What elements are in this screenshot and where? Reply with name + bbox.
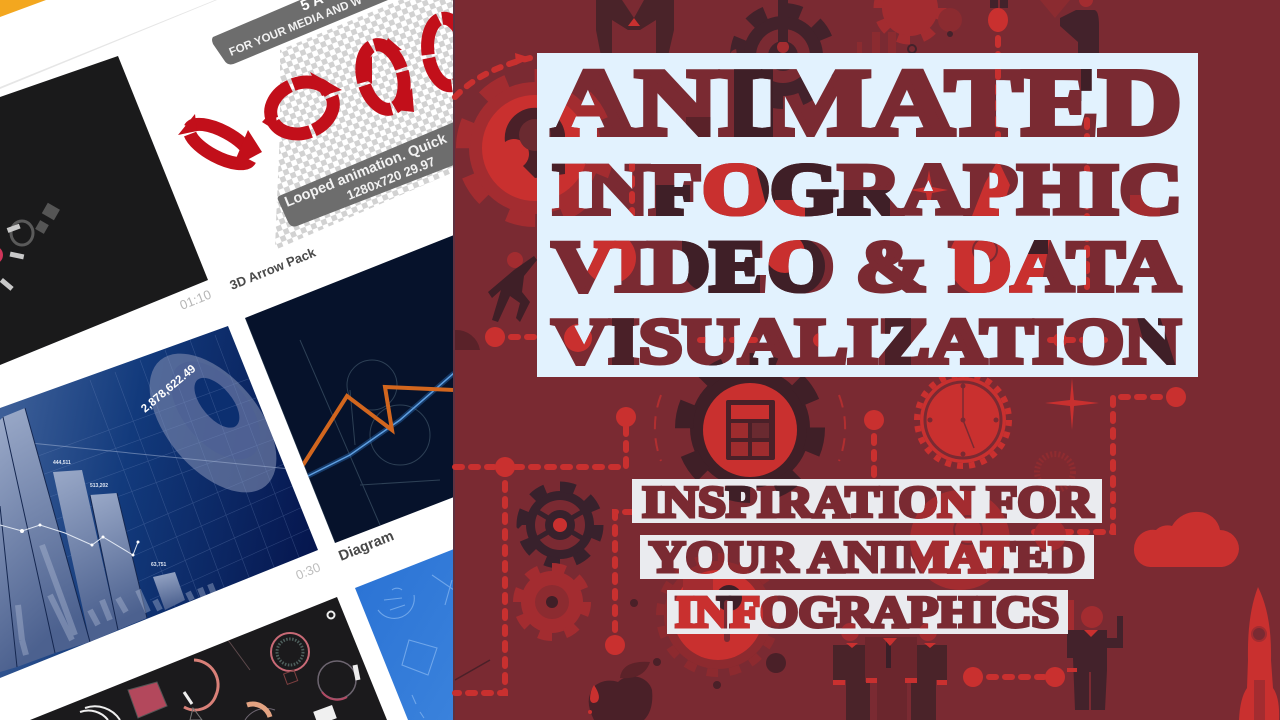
through-letter shapes (564, 67, 1176, 367)
thumbnail: blue bar chart: 513,202 (90, 483, 108, 489)
title text: VISUALIZATION (552, 307, 1180, 377)
value label: 2,878,622.49 (139, 363, 198, 415)
title text: INFOGRAPHIC (552, 150, 1182, 230)
subtitle text: INSPIRATION FOR (642, 478, 1094, 527)
icon: dark gear (522, 487, 598, 563)
dashed connector lines (455, 22, 1176, 693)
thumbnail: 3D arrow pack (178, 0, 471, 313)
thumbnail: blue bar chart (0, 325, 340, 678)
title text: ANIMATED (552, 49, 1182, 155)
subtitle text: INFOGRAPHICS (675, 588, 1059, 637)
icon: top red gear (857, 0, 962, 56)
icon: top right businessman (990, 0, 1099, 56)
subtitle text (642, 478, 1094, 637)
subtitle text: YOUR ANIMATED (649, 533, 1085, 582)
title text: VIDEO & DATA (552, 227, 1180, 307)
icon: chart sketch (455, 660, 490, 680)
bar separators (0, 408, 147, 667)
decorative dots (630, 599, 786, 689)
icon: head gear (463, 76, 607, 220)
label: grey banner bottom: 1280x720 29.97 (345, 154, 437, 203)
orange header corner (0, 0, 46, 17)
icon: cloud (1134, 512, 1239, 567)
panel: maroon background (454, 0, 1280, 720)
label: 3D Arrow Pack: 3D Arrow Pack (228, 244, 318, 293)
icon: businessmen group (833, 623, 947, 720)
icon: sparkle star (1045, 378, 1099, 430)
icon: top left businessman (596, 0, 674, 56)
duration 01:10: 01:10 (178, 287, 213, 313)
title text (552, 49, 1182, 377)
panel: marketplace screenshot (0, 0, 471, 720)
connector nodes (485, 8, 1186, 687)
calculator body (726, 400, 775, 460)
background artwork (455, 0, 1279, 720)
icon: lower red gear behind subtitle (660, 557, 776, 673)
icon: clock (917, 374, 1009, 466)
label: Diagram: Diagram (337, 528, 396, 565)
icon: calculator gear (655, 362, 845, 494)
small bars (18, 545, 214, 655)
duration 0:30: 0:30 (294, 559, 323, 583)
icon: rocket (1239, 587, 1279, 720)
icon: central gear behind subtitle (910, 490, 1074, 630)
title panel (537, 53, 1198, 377)
icon: top dark gear (737, 0, 829, 102)
line series (0, 525, 138, 555)
thumbnail: black video tile (0, 56, 208, 365)
icon: apple (588, 662, 652, 720)
thumbnail: blue bar chart: 63,751 (151, 562, 167, 568)
thumbnail: dark HUD circles (30, 597, 387, 720)
icon: red 3D arrow rings (178, 16, 471, 171)
target rings (150, 354, 276, 492)
thumbnail: blue bar chart: 444,511 (53, 460, 71, 466)
subtitle panel (632, 479, 1102, 634)
thumbnail: orange diagram (245, 235, 454, 543)
icon: mid red gear (518, 568, 586, 636)
icon: man with raised arm (1067, 606, 1123, 710)
label: grey banner bottom: Looped animation. Quick (283, 131, 450, 211)
thumbnail: blue icons tile (355, 549, 454, 720)
icon: sun gear small (1037, 454, 1073, 490)
icon: runner (488, 252, 537, 322)
bars (0, 408, 185, 672)
